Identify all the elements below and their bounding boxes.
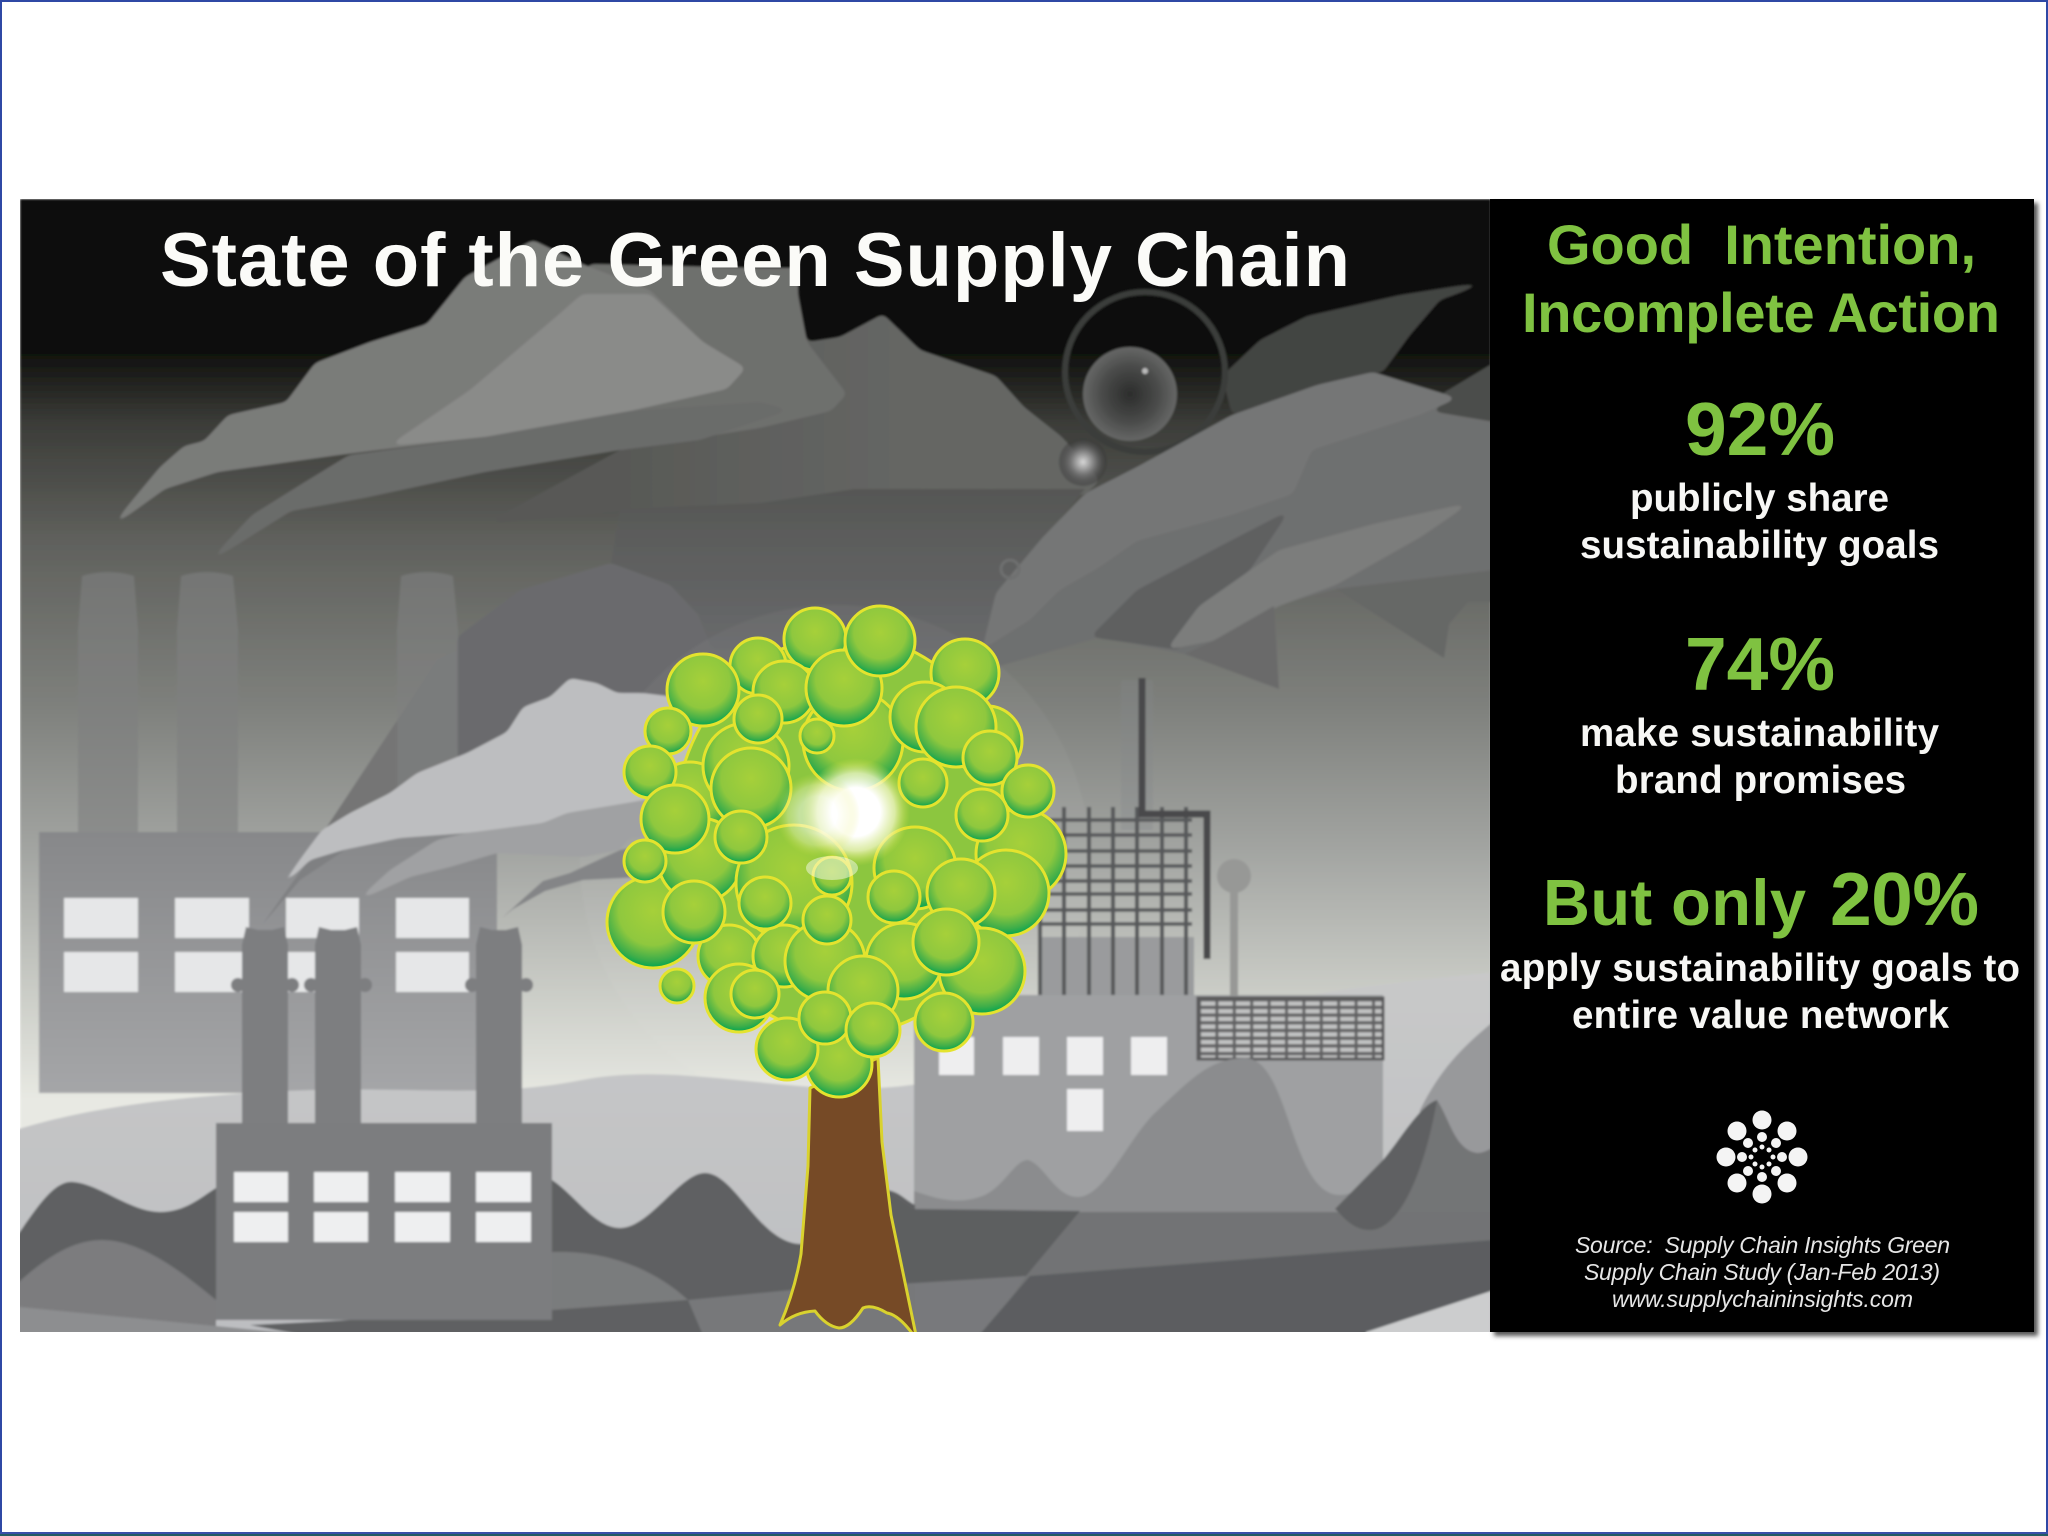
title: State of the Green Supply Chain [160, 218, 1350, 303]
light hills [0, 970, 1520, 1340]
right smoke plumes [1000, 408, 1490, 664]
right statistics panel [1490, 199, 2038, 1336]
stat: but only 20% [1500, 857, 2020, 1037]
glow halo [580, 605, 1090, 1115]
tree foliage bubbles [607, 606, 1066, 1097]
back-left chimneys [78, 572, 458, 832]
stat: but only 20%: But only [1543, 866, 1806, 939]
stat: 74% [1580, 622, 1940, 802]
panel heading: Incomplete Action [1522, 281, 2000, 344]
grey factory background [0, 199, 1530, 1340]
source note: Source: Supply Chain Insights Green [1575, 1232, 1950, 1258]
stat: but only 20%: entire value network [1572, 994, 1950, 1037]
icon: Supply Chain Insights logo [1716, 1110, 1808, 1204]
panel heading: Good Intention, [1547, 213, 1976, 276]
front-left factory [216, 927, 552, 1320]
stat: 92% [1580, 387, 1939, 567]
source note: Supply Chain Study (Jan-Feb 2013) [1584, 1259, 1940, 1285]
stat: 74%: brand promises [1615, 759, 1906, 802]
stat: 74%: make sustainability [1580, 712, 1940, 755]
stat: 92%: publicly share [1630, 477, 1889, 520]
illustration: polluted factory scene with tree [0, 199, 1530, 1340]
source note [1575, 1232, 1950, 1312]
tree trunk [780, 1058, 917, 1340]
foliage base mass [684, 646, 1002, 1026]
chimney smoke layers [262, 678, 700, 925]
stat: 92%: sustainability goals [1580, 524, 1939, 567]
sun glow on tree [776, 758, 910, 880]
lens flare [1059, 292, 1225, 486]
mid-tone cloud behind top plume [588, 262, 844, 434]
tree [607, 606, 1066, 1340]
top-left smoke plume [120, 239, 670, 519]
stat: but only 20%: apply sustainability goals to [1500, 947, 2020, 990]
back-right factory [914, 678, 1383, 1209]
right dark wing [1226, 283, 1474, 412]
back-left building [39, 832, 497, 1093]
panel heading [1522, 213, 2000, 344]
source note: www.supplychaininsights.com [1612, 1286, 1913, 1312]
stat: 74%: 74% [1685, 622, 1835, 706]
stat: 92%: 92% [1685, 387, 1835, 471]
stat: but only 20%: 20% [1830, 857, 1979, 941]
foreground hills [1419, 1024, 1490, 1154]
